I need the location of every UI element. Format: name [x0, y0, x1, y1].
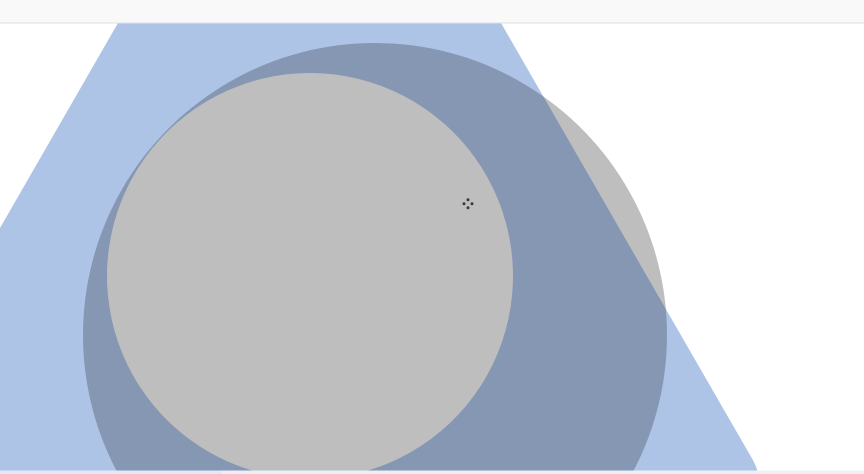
icon: move cursor	[462, 198, 474, 209]
overlap of large circle and hexagon	[83, 43, 667, 471]
inner gray circle	[107, 73, 513, 471]
top toolbar strip	[0, 0, 864, 24]
bottom strip	[0, 470, 864, 474]
large gray circle	[83, 43, 667, 471]
